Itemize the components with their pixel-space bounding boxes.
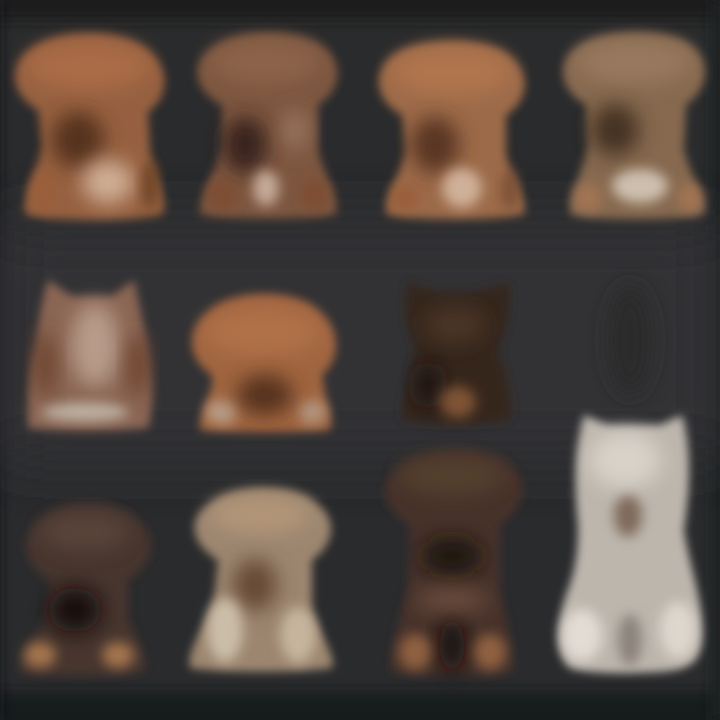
dog: row 3 column 3, dark chocolate: [385, 450, 523, 676]
dog: row 1 column 1, ginger: [15, 34, 165, 220]
dog: row 2 column 1, cat-eared cream: [27, 280, 152, 431]
dog: row 3 column 4, tall white: [558, 415, 702, 673]
dog: row 1 column 2, brown: [197, 33, 338, 218]
dog: row 3 column 1, dark brown: [19, 504, 151, 676]
dog: row 1 column 3, ginger: [379, 41, 525, 219]
dog: row 2 column 2, ginger dome: [192, 294, 336, 432]
faint silhouette above white dog: [608, 285, 652, 395]
dog: row 2 column 3, dark: [402, 282, 511, 424]
dog: row 1 column 4, tan grey: [563, 32, 705, 219]
dog: row 3 column 2, cream tan: [189, 488, 333, 672]
